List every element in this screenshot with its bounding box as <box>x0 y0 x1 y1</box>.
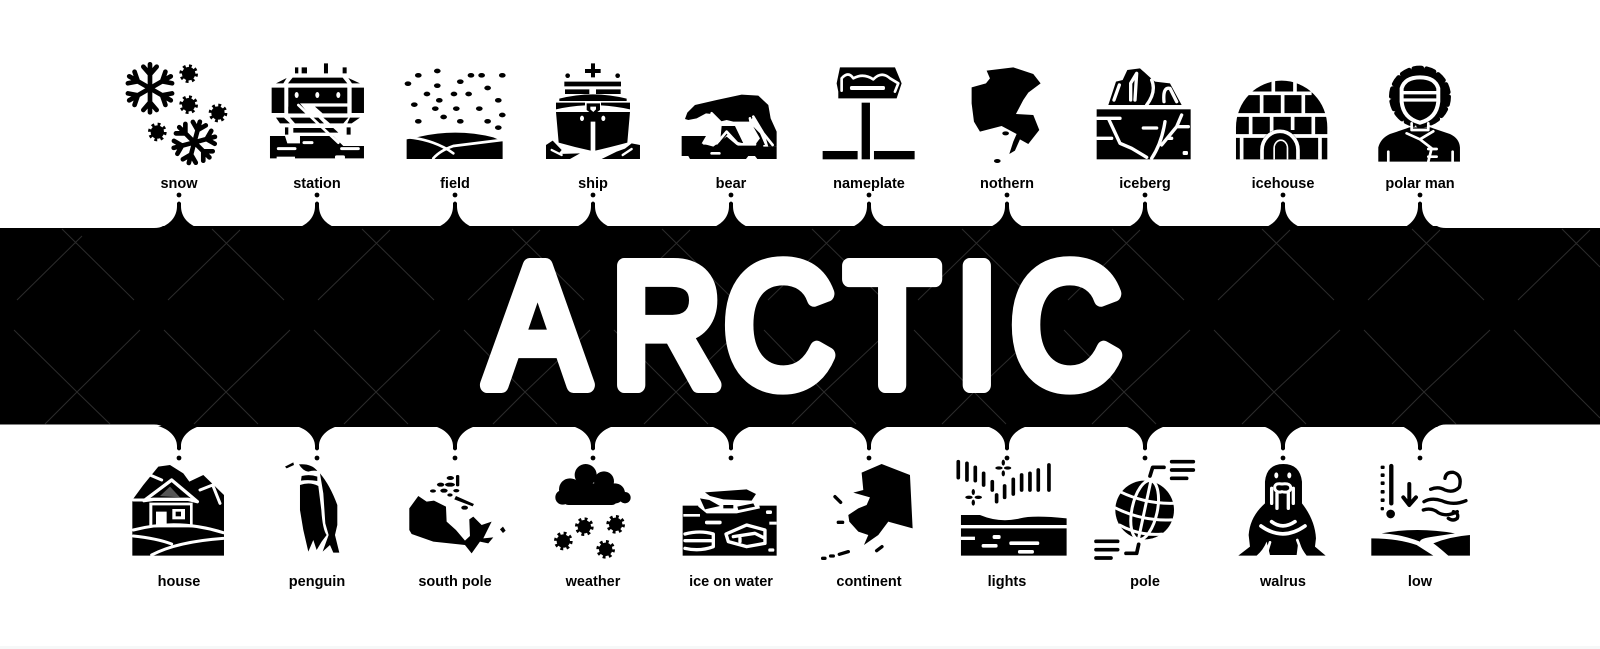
icon: weather <box>555 464 631 557</box>
icon: lights <box>958 460 1067 556</box>
icon: penguin <box>285 462 339 553</box>
icon: field <box>405 69 506 159</box>
icon: icehouse <box>1235 78 1328 159</box>
icon: nameplate <box>823 67 915 159</box>
icon: nothern <box>972 67 1041 163</box>
icon: snow <box>126 64 225 169</box>
label: low: low <box>1408 574 1433 590</box>
title: ARCTIC <box>487 228 1121 422</box>
label: ship: ship <box>578 176 608 192</box>
icon: house <box>132 465 224 556</box>
icon: iceberg <box>1097 68 1191 159</box>
label: field: field <box>440 176 470 192</box>
label: snow: snow <box>160 176 198 192</box>
label: bear: bear <box>716 176 747 192</box>
label: iceberg: iceberg <box>1119 176 1171 192</box>
label: walrus: walrus <box>1259 574 1306 590</box>
label: ice on water: ice on water <box>689 574 773 590</box>
icon: ice on water <box>683 489 777 556</box>
label: south pole: south pole <box>418 574 492 590</box>
label: weather: weather <box>565 574 621 590</box>
label: penguin: penguin <box>289 574 345 590</box>
label: lights: lights <box>988 574 1026 590</box>
label: station: station <box>293 176 341 192</box>
icon: low <box>1371 466 1470 556</box>
label: pole: pole <box>1130 574 1160 590</box>
label: icehouse: icehouse <box>1252 176 1314 192</box>
icon: polar man <box>1378 68 1460 162</box>
central black band with connectors <box>0 193 1600 460</box>
label: nameplate: nameplate <box>833 176 905 192</box>
label: nothern: nothern <box>980 176 1034 192</box>
label: continent: continent <box>836 574 902 590</box>
icon: pole <box>1096 462 1193 558</box>
icon: south pole <box>409 475 506 553</box>
label: polar man: polar man <box>1385 176 1455 192</box>
icon: ship <box>546 63 640 159</box>
icon: station <box>270 63 364 159</box>
icon: continent <box>823 464 913 558</box>
label: house: house <box>158 574 200 590</box>
icon: walrus <box>1238 464 1326 556</box>
icon: bear <box>682 95 777 159</box>
